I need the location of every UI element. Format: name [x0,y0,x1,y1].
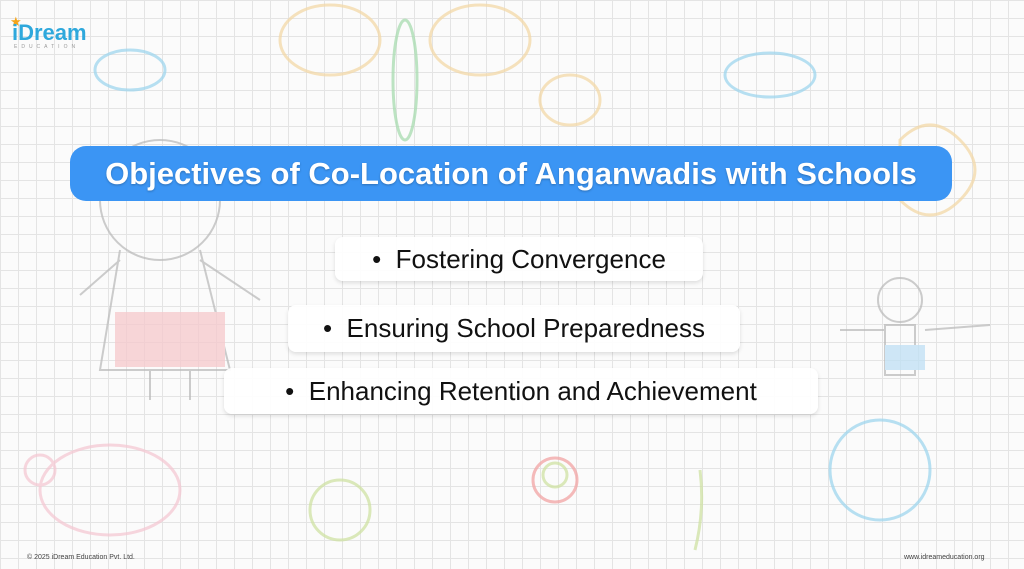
footer copyright: © 2025 iDream Education Pvt. Ltd. [27,554,135,561]
objective 2: • Ensuring School Preparedness [323,313,705,343]
title: Objectives of Co-Location of Anganwadis with Schools [105,156,917,190]
footer url: www.idreameducation.org [904,554,985,561]
objective 1 [335,237,703,281]
objective 1: • Fostering Convergence [372,244,666,274]
logo: ★ [10,14,22,29]
logo [10,14,87,50]
objective 3 [224,368,818,414]
text: EDUCATION [14,44,79,50]
objective 3: • Enhancing Retention and Achievement [285,376,757,406]
title [70,146,952,201]
objective 2 [288,305,740,352]
logo: iDream [12,20,87,45]
